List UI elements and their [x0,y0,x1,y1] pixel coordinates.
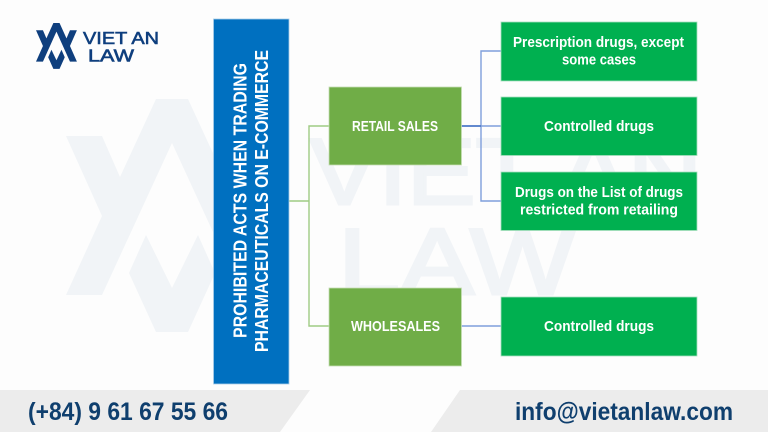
panel: controlled drugs (wholesale): Controlled drugs [544,318,654,335]
footer: email: info@vietanlaw.com [515,398,733,426]
panel: controlled drugs (wholesale) [501,297,697,356]
logo: Viet An Law [36,23,159,69]
connectors: title to categories [289,126,329,326]
watermark: Viet An Law logo: VIET AN [310,119,702,224]
panel: retail sales [329,87,462,165]
panel: restricted drugs list [501,172,697,230]
connectors: categories to drug groups [461,51,501,326]
panel: wholesales [329,288,462,366]
footer: phone [0,390,310,432]
logo: Viet An Law: VIET AN [83,28,159,48]
panel: prescription drugs [501,22,697,81]
panel: prescription drugs: some cases [562,52,636,68]
watermark: Viet An Law logo [66,99,702,332]
panel: title [214,19,289,384]
panel: restricted drugs list: Drugs on the List of drugs [515,184,683,201]
panel: retail sales: RETAIL SALES [352,118,438,135]
footer: email [431,390,768,432]
footer: phone: (+84) 9 61 67 55 66 [28,398,228,426]
panel: prescription drugs: Prescription drugs, except [513,34,684,51]
watermark: Viet An Law logo: LAW [338,209,575,314]
panel: wholesales: WHOLESALES [351,318,440,335]
panel: controlled drugs (retail) [501,97,697,156]
title text line 1: PROHIBITED ACTS WHEN TRADING [230,63,250,338]
panel: restricted drugs list: restricted from retailing [520,202,678,218]
connector: retail stem [461,125,481,127]
panel: controlled drugs (retail): Controlled drugs [544,118,654,135]
title text line 2: PHARMACEUTICALS ON E-COMMERCE [252,50,272,352]
logo: Viet An Law: LAW [88,46,135,66]
